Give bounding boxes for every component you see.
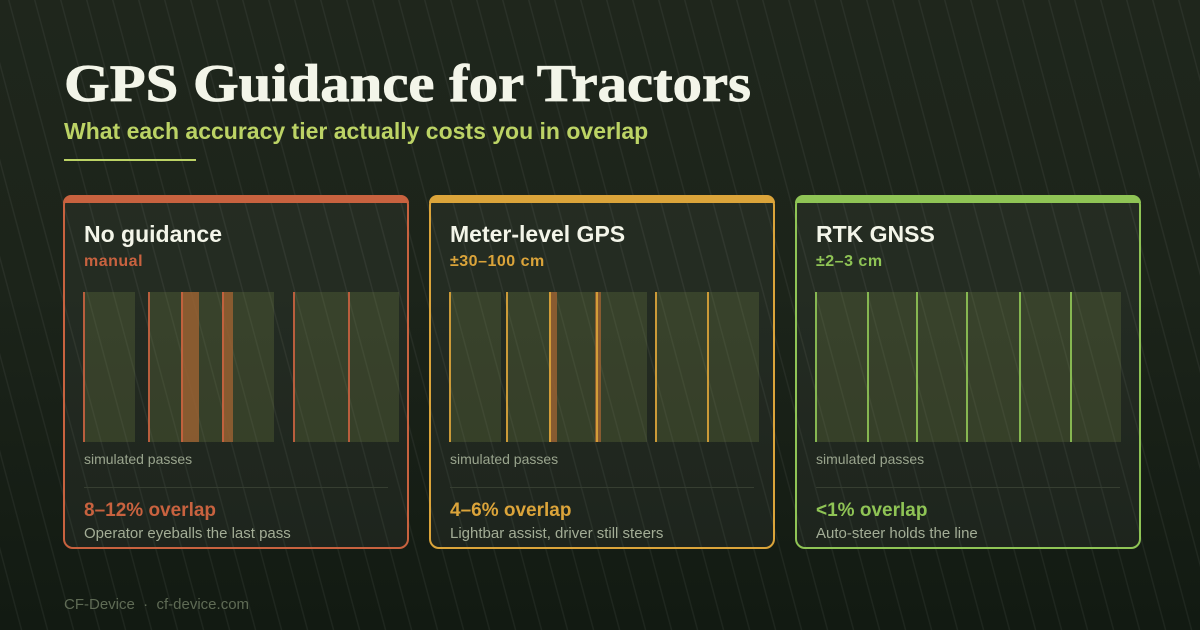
panel accent bar	[63, 195, 409, 203]
title: GPS Guidance for Tractors	[64, 55, 751, 113]
tier name: Meter-level GPS	[450, 221, 625, 247]
tier accuracy: manual	[84, 253, 143, 270]
overlap figure: 4–6% overlap	[450, 500, 571, 521]
panel: RTK GNSS	[795, 195, 1141, 549]
panel: meter-level GPS	[429, 195, 775, 549]
tier name: No guidance	[84, 221, 222, 247]
overlap figure: 8–12% overlap	[84, 500, 216, 521]
chart caption: simulated passes	[816, 451, 924, 467]
subtitle: What each accuracy tier actually costs you in overlap	[64, 118, 648, 144]
simulated passes chart	[815, 292, 1121, 442]
chart caption: simulated passes	[450, 451, 558, 467]
note: Lightbar assist, driver still steers	[450, 525, 663, 542]
panel accent bar	[429, 195, 775, 203]
panel: no guidance	[63, 195, 409, 549]
note: Auto-steer holds the line	[816, 525, 978, 542]
tier name: RTK GNSS	[816, 221, 935, 247]
simulated passes chart	[449, 292, 759, 442]
chart caption: simulated passes	[84, 451, 192, 467]
panel accent bar	[795, 195, 1141, 203]
note: Operator eyeballs the last pass	[84, 525, 291, 542]
tier accuracy: ±2–3 cm	[816, 253, 883, 270]
footer: CF-Device · cf-device.com	[64, 596, 249, 613]
overlap figure: <1% overlap	[816, 500, 927, 521]
title underline	[64, 159, 196, 161]
tier accuracy: ±30–100 cm	[450, 253, 545, 270]
simulated passes chart	[83, 292, 399, 442]
